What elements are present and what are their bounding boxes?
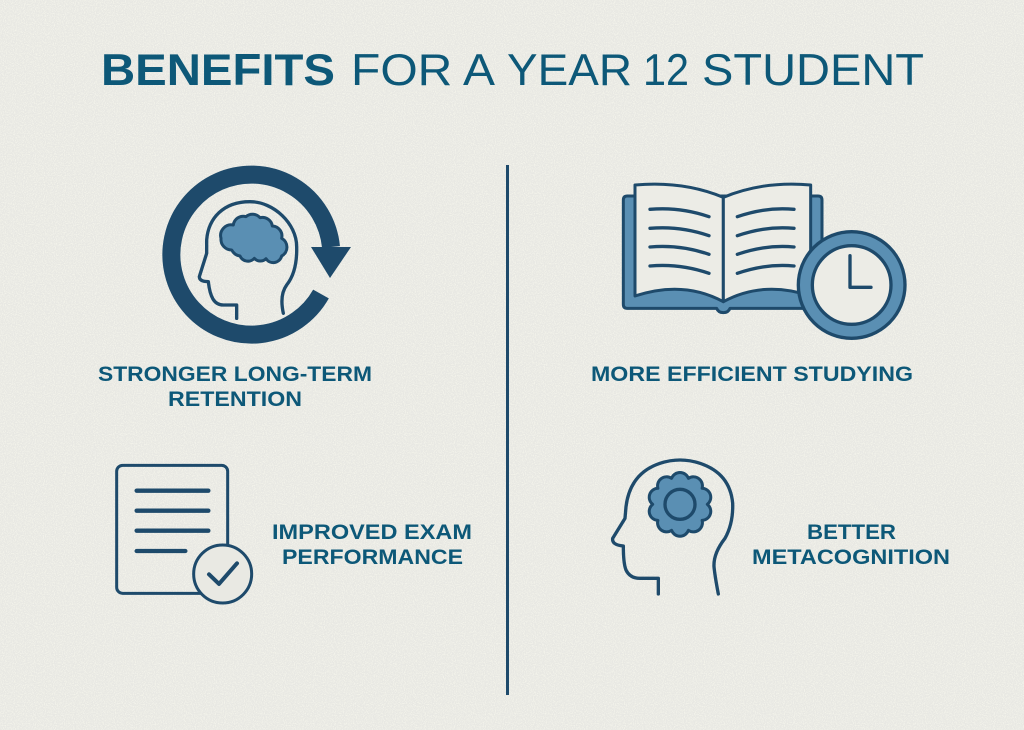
label: better metacognition [752, 521, 950, 569]
label: improved exam performance: IMPROVED EXAM [272, 521, 472, 544]
icon: head with gear [613, 460, 733, 594]
label: improved exam performance: PERFORMANCE [282, 546, 463, 569]
title [101, 46, 924, 95]
title: YEAR [507, 46, 632, 95]
label: stronger long-term retention [98, 363, 372, 411]
title: 12 [643, 46, 689, 95]
center divider [506, 165, 509, 695]
label: improved exam performance [272, 521, 472, 569]
label: stronger long-term retention: STRONGER LONG-TERM [98, 363, 372, 386]
icon: open book with clock [623, 184, 905, 338]
label: stronger long-term retention: RETENTION [168, 388, 302, 411]
icon: brain with circular arrow [171, 175, 351, 335]
title: STUDENT [702, 46, 924, 95]
icon: document with check mark [117, 465, 252, 603]
label: more efficient studying: MORE EFFICIENT STUDYING [591, 363, 913, 386]
label: better metacognition: METACOGNITION [752, 546, 950, 569]
title: BENEFITS [101, 46, 335, 95]
title: FOR A [351, 46, 495, 95]
label: better metacognition: BETTER [807, 521, 896, 544]
